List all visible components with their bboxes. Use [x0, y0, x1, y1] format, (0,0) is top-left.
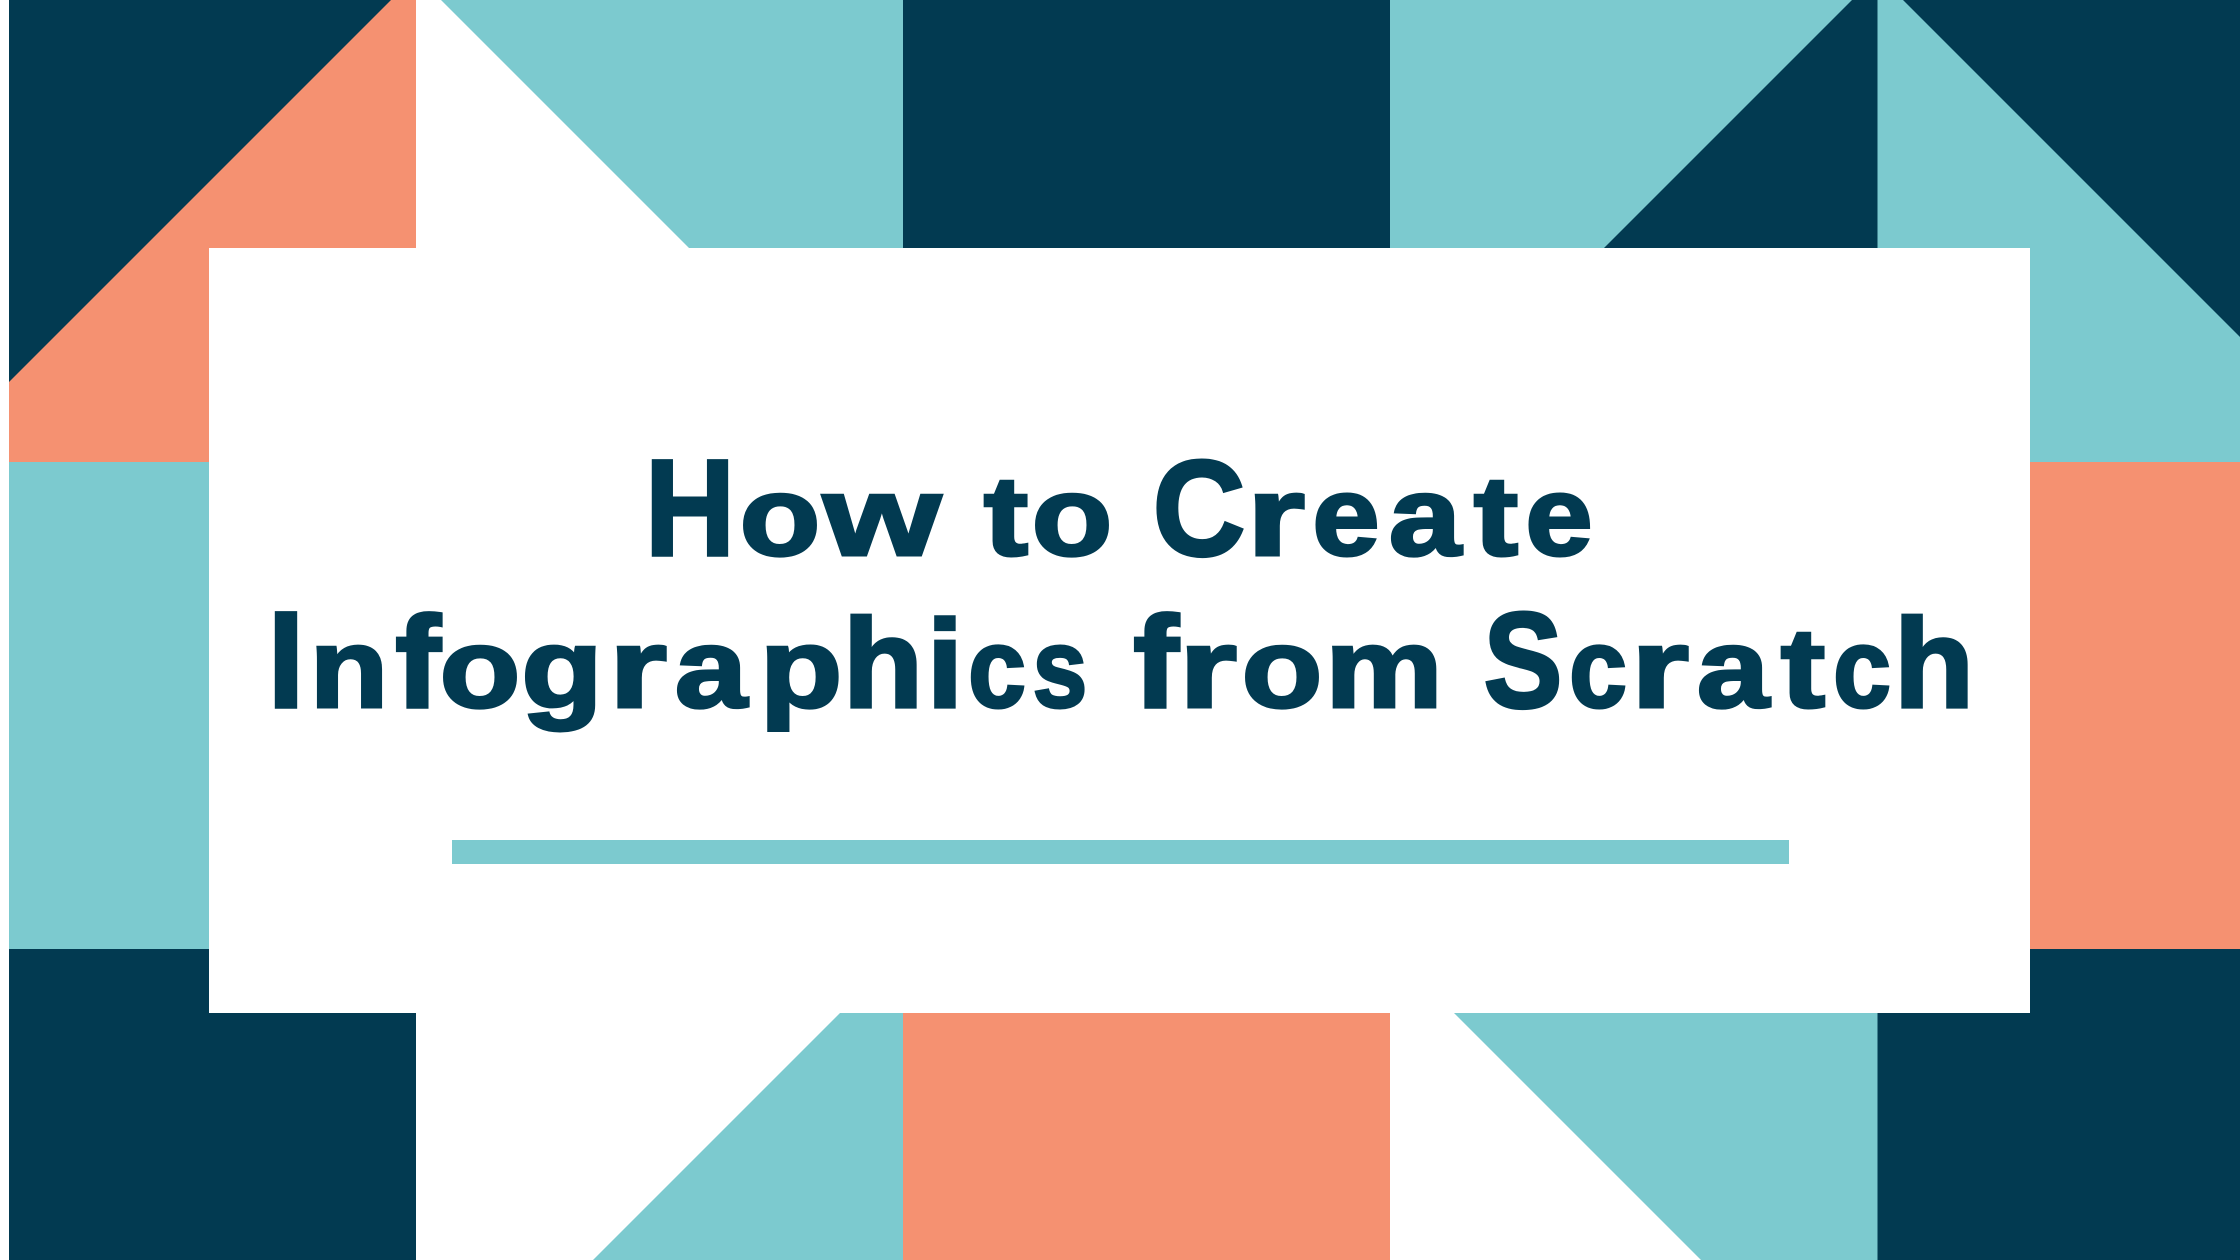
- panel: top-right teal block: [1878, 0, 2240, 462]
- title: h: [1894, 593, 1974, 734]
- title: p: [759, 605, 842, 731]
- panel: top-left navy triangle: [9, 0, 391, 382]
- panel: right orange block: [1878, 462, 2240, 949]
- title: e: [1312, 453, 1380, 579]
- title: r: [1178, 605, 1237, 731]
- title: f: [1133, 589, 1179, 734]
- title: C: [1152, 432, 1245, 584]
- panel: left teal block: [9, 462, 416, 949]
- title: a: [675, 605, 747, 731]
- title: o: [439, 605, 520, 731]
- title: H: [645, 431, 735, 584]
- title: g: [521, 605, 602, 731]
- panel: bottom teal triangle right: [1454, 1013, 1878, 1260]
- panel: central white card: [209, 248, 2030, 1013]
- panel: top teal shape: [441, 0, 903, 300]
- title: a: [1388, 453, 1461, 579]
- panel: top navy triangle: [1552, 0, 1878, 300]
- panel: bottom-right navy block: [1878, 949, 2240, 1260]
- title: t: [1780, 605, 1825, 731]
- title: r: [608, 605, 667, 731]
- title: n: [309, 605, 388, 731]
- title: o: [1241, 605, 1322, 731]
- title: h: [843, 593, 923, 734]
- title: s: [1032, 605, 1087, 731]
- title: r: [1630, 605, 1689, 731]
- title: e: [1525, 453, 1592, 579]
- panel: top navy block: [903, 0, 1390, 300]
- panel: bottom orange block: [903, 1000, 1390, 1260]
- title: w: [823, 453, 940, 579]
- title: I: [268, 583, 304, 736]
- title: t: [1473, 453, 1518, 579]
- title: c: [1569, 605, 1627, 731]
- title: m: [1325, 605, 1443, 731]
- title: f: [395, 589, 441, 734]
- title: r: [1246, 453, 1305, 579]
- panel: bottom teal triangle left: [593, 1013, 903, 1260]
- title: o: [739, 453, 820, 579]
- accent bar: [452, 840, 1789, 864]
- panel: bottom-left navy block: [9, 949, 416, 1260]
- title: S: [1484, 584, 1562, 736]
- title: o: [1031, 453, 1112, 579]
- title: c: [1833, 605, 1890, 731]
- title: i: [926, 595, 963, 733]
- panel: top teal block: [1390, 0, 1878, 300]
- panel: top-left orange block: [9, 0, 416, 462]
- panel: top-right navy triangle: [1903, 0, 2240, 337]
- title: a: [1697, 605, 1769, 731]
- title: t: [983, 453, 1028, 579]
- title: c: [968, 605, 1026, 731]
